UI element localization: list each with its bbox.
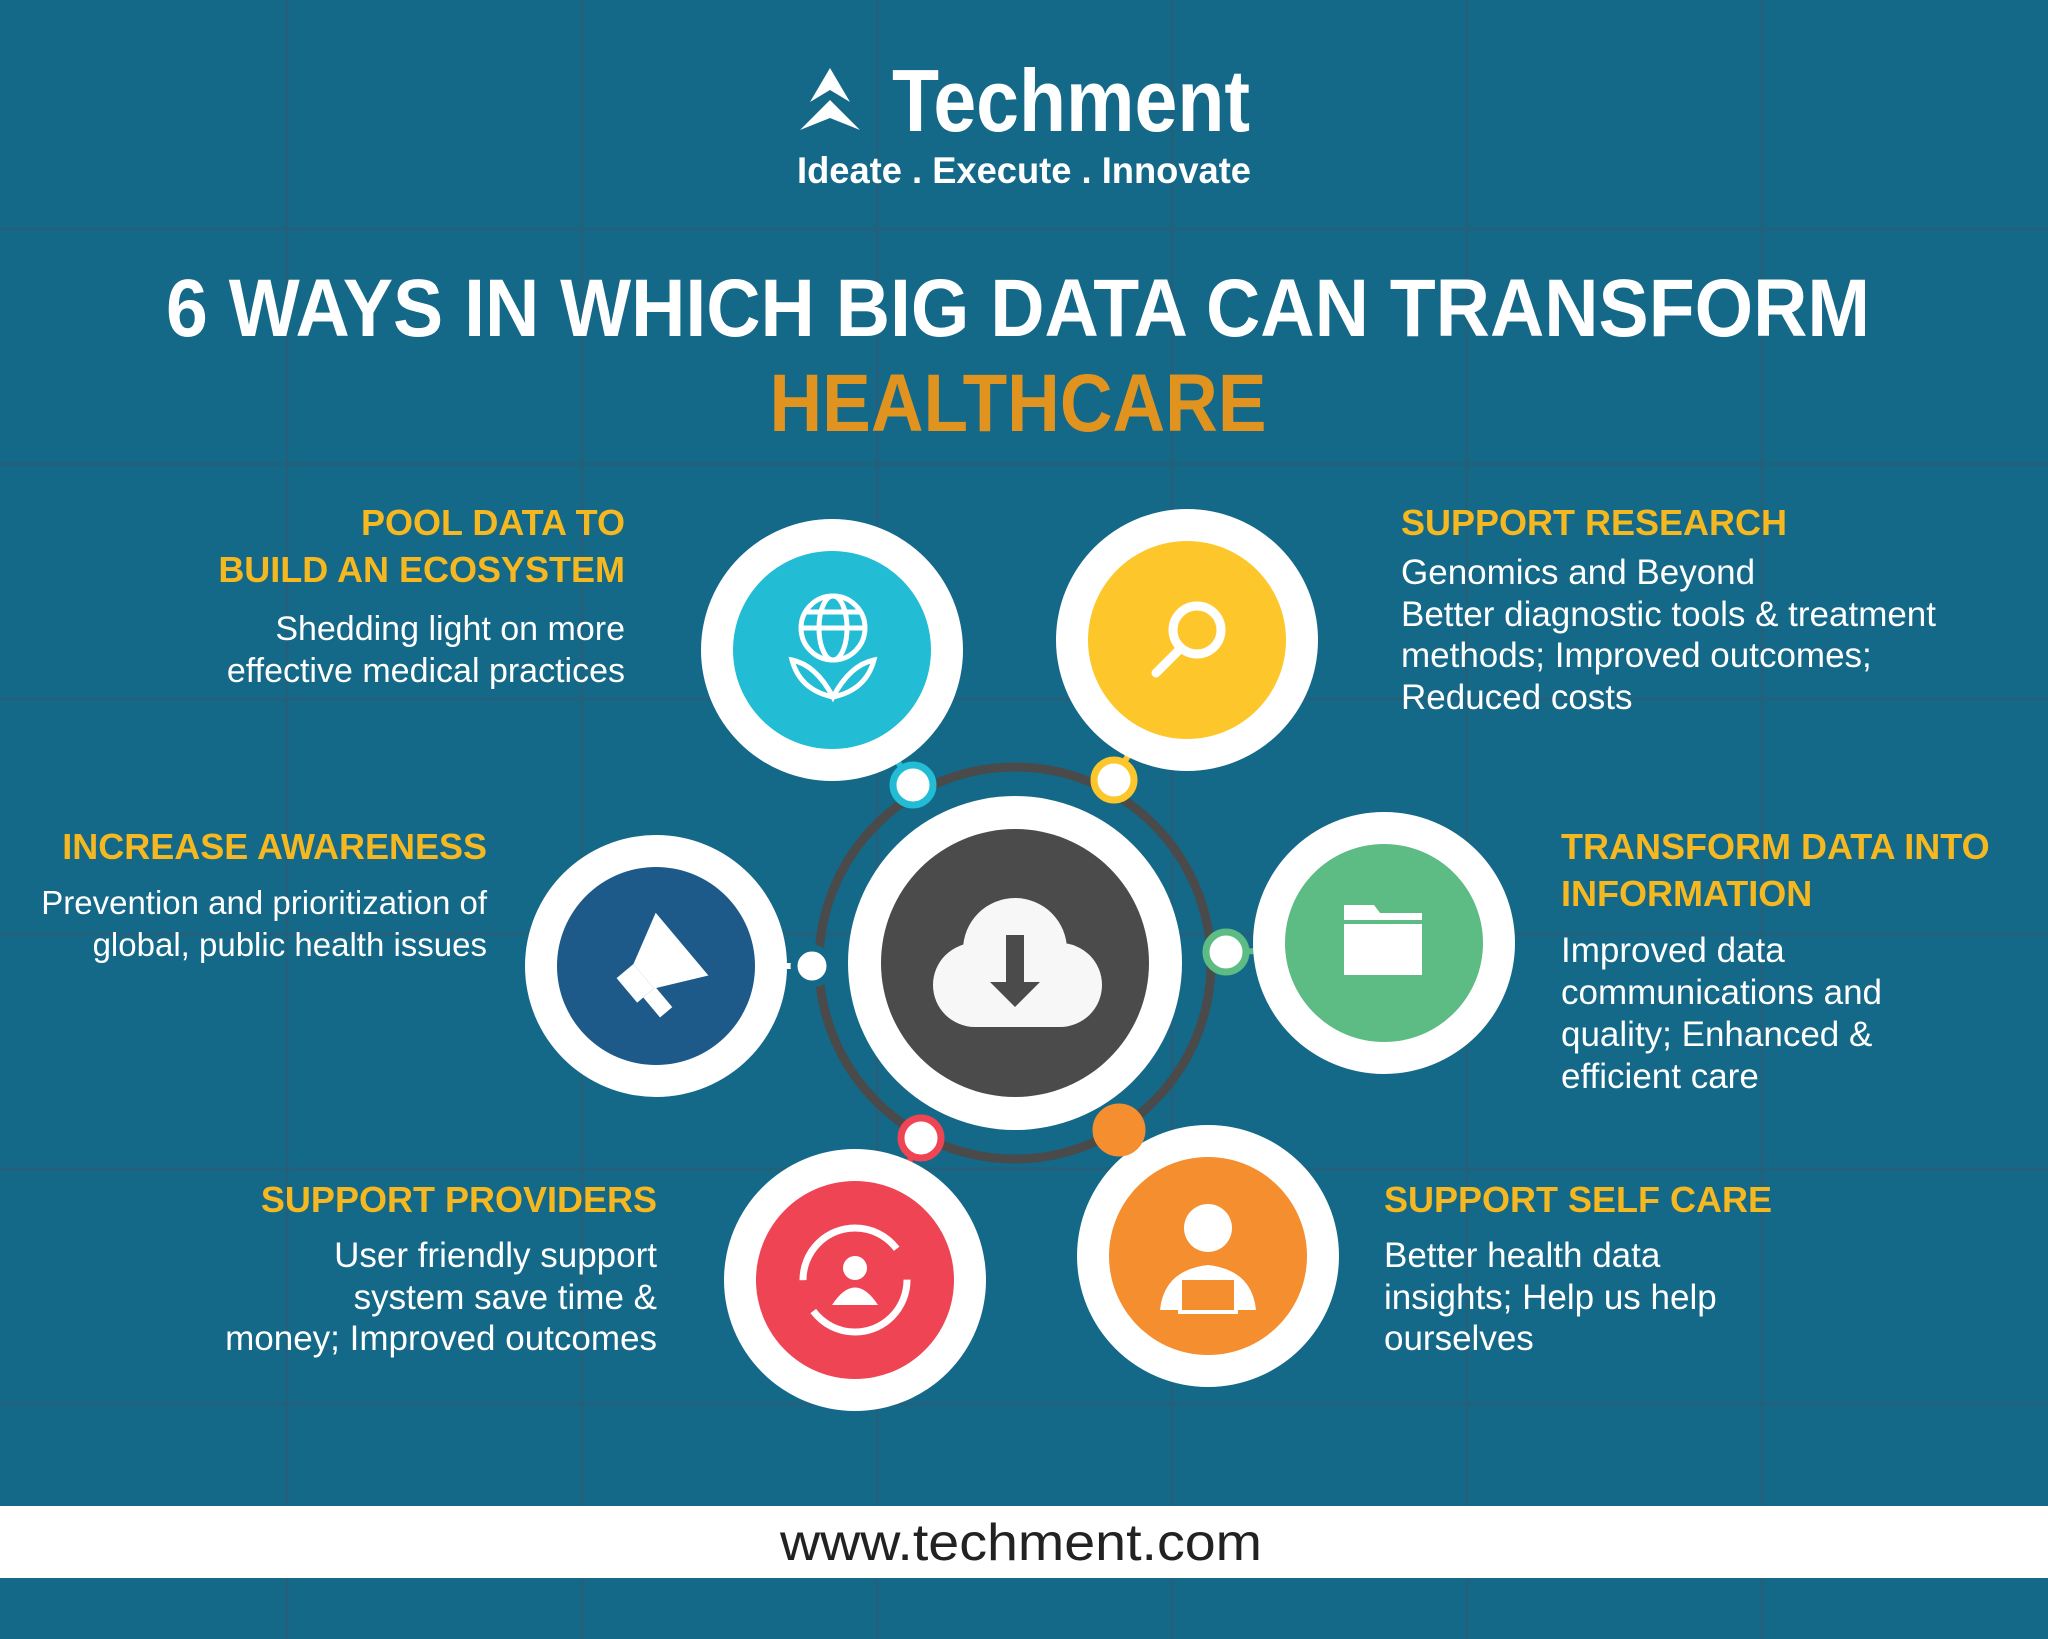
title: 6 WAYS IN WHICH BIG DATA CAN TRANSFORM (166, 263, 1870, 354)
text: transform data: efficient care (1561, 1057, 1759, 1096)
text: transform data: INFORMATION (1561, 873, 1812, 914)
text: support research: Better diagnostic tools & treatment (1401, 595, 1936, 634)
circle: folder (1253, 812, 1515, 1074)
circle: globe (701, 519, 963, 781)
ring (819, 767, 1211, 1159)
text: transform data (1561, 826, 1990, 1096)
text: increase awareness: Prevention and prioritization of (41, 884, 488, 921)
footer (0, 1506, 2048, 1578)
text: support self care: ourselves (1384, 1319, 1534, 1358)
text: support self care (1384, 1179, 1772, 1358)
connector dots (794, 760, 1246, 1158)
text: transform data: TRANSFORM DATA INTO (1561, 826, 1990, 867)
text: support providers: User friendly support (334, 1236, 657, 1275)
connector lines (760, 735, 1290, 1180)
brand name: Techment (892, 51, 1250, 150)
text: support self care: SUPPORT SELF CARE (1384, 1179, 1772, 1220)
text: transform data: Improved data (1561, 931, 1785, 970)
text: support research: SUPPORT RESEARCH (1401, 502, 1787, 543)
circle: megaphone (525, 835, 787, 1097)
text: transform data: quality; Enhanced & (1561, 1015, 1872, 1054)
text: transform data: communications and (1561, 973, 1882, 1012)
title (166, 263, 1870, 449)
text: support providers: SUPPORT PROVIDERS (261, 1179, 657, 1220)
title: HEALTHCARE (770, 358, 1266, 449)
icon: logo mark (800, 68, 860, 130)
text: pool data: Shedding light on more (275, 610, 625, 648)
text: support research: Reduced costs (1401, 678, 1633, 717)
text: pool data: POOL DATA TO (361, 502, 625, 543)
text: support providers (225, 1179, 657, 1358)
icon: cloud (933, 898, 1102, 1027)
footer: www.techment.com (779, 1514, 1262, 1572)
text: pool data: BUILD AN ECOSYSTEM (218, 549, 625, 590)
text: support research: Genomics and Beyond (1401, 553, 1755, 592)
text: pool data (218, 502, 625, 690)
center circle: cloud download (848, 796, 1182, 1130)
logo (797, 51, 1251, 191)
text: increase awareness (41, 826, 488, 963)
text: support providers: money; Improved outcomes (225, 1319, 657, 1358)
text: support providers: system save time & (354, 1278, 657, 1317)
circle: sync person (724, 1149, 986, 1411)
text: increase awareness: INCREASE AWARENESS (62, 826, 487, 867)
circle: search (1056, 509, 1318, 771)
text: support research: methods; Improved outcomes; (1401, 636, 1872, 675)
tagline: Ideate . Execute . Innovate (797, 150, 1251, 191)
text: increase awareness: global, public health issues (93, 926, 487, 963)
circle: self care person (1077, 1125, 1339, 1387)
text: support self care: insights; Help us help (1384, 1278, 1717, 1317)
text: support self care: Better health data (1384, 1236, 1661, 1275)
text: pool data: effective medical practices (227, 652, 625, 690)
text: support research (1401, 502, 1936, 717)
